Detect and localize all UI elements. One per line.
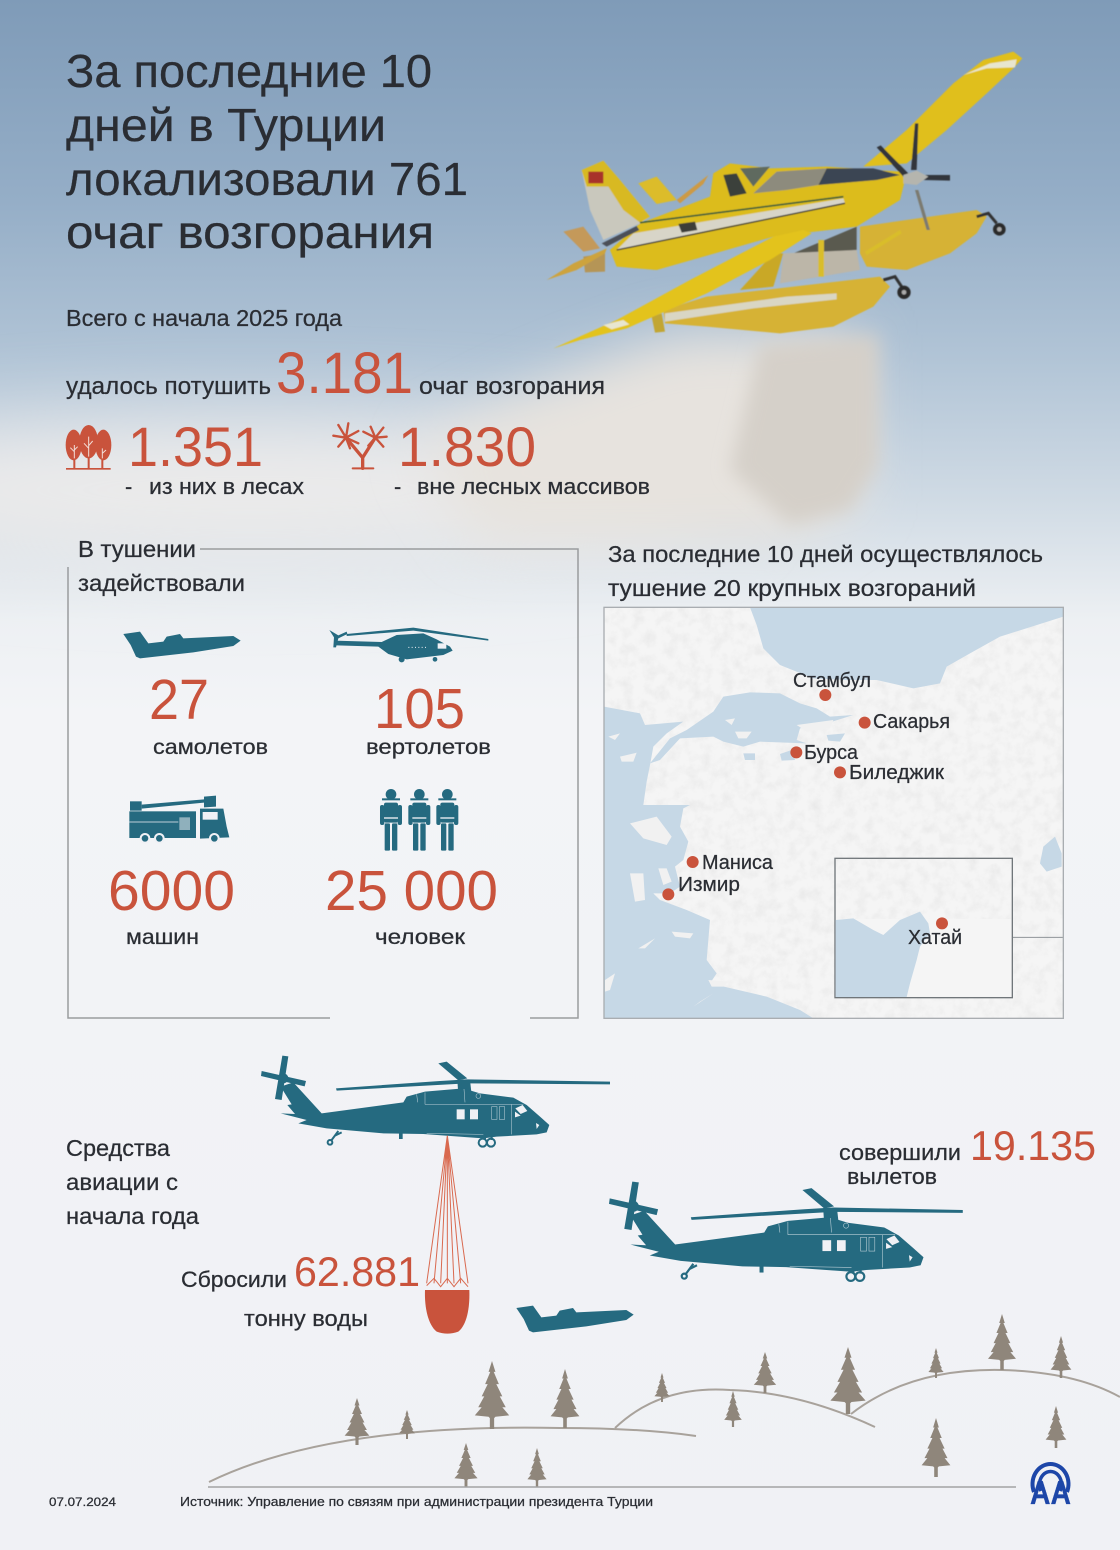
icon: forest trees	[66, 425, 111, 470]
total fires stat: удалось потушить	[66, 373, 271, 400]
icon: palm tree	[333, 423, 387, 468]
city labels: Маниса	[702, 852, 774, 874]
city labels	[678, 670, 962, 949]
seas	[604, 607, 1063, 1018]
stat: helicopters	[366, 677, 491, 759]
title: локализовали 761	[66, 153, 468, 205]
stat: personnel: человек	[375, 926, 466, 949]
stat: sorties: совершили	[839, 1140, 961, 1165]
panel heading: задействовали	[78, 570, 245, 596]
photo: yellow firefighting plane	[547, 52, 1022, 348]
stat: fires outside forests: вне лесных массивов	[417, 474, 650, 499]
total fires stat: очаг возгорания	[419, 373, 605, 400]
icon: amphibious plane	[123, 632, 241, 658]
stat: planes: самолетов	[153, 736, 268, 759]
helicopter	[261, 1056, 610, 1147]
title: За последние 10	[66, 45, 432, 97]
footer rule	[208, 1486, 1016, 1488]
city labels: Хатай	[908, 927, 962, 949]
stat: fires in forests: -	[125, 474, 132, 499]
stat: water dropped	[181, 1248, 420, 1331]
stat: fires outside forests: 1.830	[398, 415, 536, 478]
stat: personnel: 25 000	[325, 859, 498, 923]
stat: fires outside forests: -	[394, 474, 401, 499]
aviation heading: авиации с	[66, 1169, 178, 1195]
stat: sorties: 19.135	[970, 1122, 1096, 1169]
stat: water dropped: Сбросили	[181, 1267, 287, 1292]
city labels: Бурса	[804, 742, 859, 764]
stat: vehicles: 6000	[108, 859, 235, 923]
icon: transport helicopter	[329, 628, 488, 662]
city labels: Биледжик	[849, 762, 944, 784]
stat: fires in forests	[125, 415, 304, 499]
stat: planes	[149, 668, 268, 759]
stat: vehicles: машин	[126, 926, 199, 949]
stat: sorties: вылетов	[847, 1164, 937, 1189]
aviation heading	[66, 1135, 199, 1229]
icon: firefighters	[380, 789, 458, 851]
title	[66, 45, 468, 258]
inset: Hatay	[835, 858, 1012, 998]
aviation heading: начала года	[66, 1203, 199, 1229]
panel heading: В тушении	[78, 536, 196, 562]
amphibious plane	[516, 1306, 634, 1332]
title: очаг возгорания	[66, 206, 434, 258]
total fires stat: 3.181	[276, 341, 413, 406]
city markers	[662, 689, 948, 929]
logo: AA: AA	[1030, 1474, 1071, 1511]
stat: planes: 27	[149, 668, 209, 732]
panel heading	[78, 536, 245, 596]
city labels: Измир	[678, 874, 740, 896]
logo: AA	[1030, 1464, 1071, 1511]
trees	[345, 1314, 1071, 1487]
title: дней в Турции	[66, 99, 386, 151]
map heading: тушение 20 крупных возгораний	[608, 575, 976, 601]
stat: fires in forests: 1.351	[128, 415, 263, 478]
panel: resources involved	[68, 536, 578, 1018]
map heading: За последние 10 дней осуществлялось	[608, 541, 1043, 567]
map heading	[608, 541, 1043, 601]
stat: fires outside forests	[394, 415, 650, 499]
helicopter with water bucket	[261, 1056, 610, 1334]
map of Turkey	[604, 607, 1063, 1018]
subtitle: Всего с начала 2025 года	[66, 305, 342, 331]
stat: helicopters: 105	[374, 677, 465, 741]
hills	[209, 1370, 1120, 1482]
stat: helicopters: вертолетов	[366, 736, 491, 759]
large helicopter	[609, 1182, 963, 1281]
city labels: Сакарья	[873, 711, 950, 733]
total fires stat	[66, 341, 605, 406]
date: 07.07.2024	[49, 1495, 116, 1509]
stat: water dropped: тонну воды	[244, 1306, 368, 1331]
stat: sorties	[839, 1122, 1096, 1189]
stat: water dropped: 62.881	[294, 1248, 420, 1295]
smoke cloud	[0, 335, 878, 560]
city labels: Стамбул	[793, 670, 871, 692]
source: Источник: Управление по связям при администрации президента Турции	[180, 1494, 653, 1509]
aviation heading: Средства	[66, 1135, 170, 1161]
icon: fire truck	[129, 796, 229, 843]
islands	[605, 718, 833, 1007]
stat: fires in forests: из них в лесах	[149, 474, 304, 499]
water bucket	[425, 1136, 469, 1334]
